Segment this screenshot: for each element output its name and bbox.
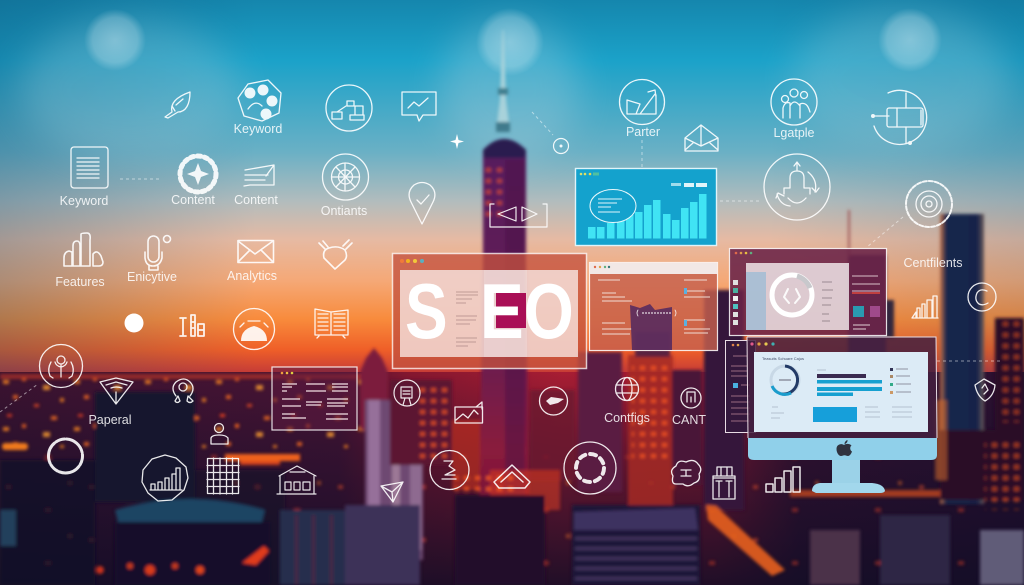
icon: signal bars	[766, 467, 800, 492]
panel: pink article window	[590, 262, 718, 350]
right buildings	[810, 530, 860, 585]
blue button	[813, 407, 857, 422]
label: Centfilents: Centfilents	[903, 256, 963, 270]
donut	[771, 366, 799, 394]
dome	[115, 499, 265, 526]
icon: C circle	[968, 283, 996, 311]
blocks mid	[530, 390, 575, 480]
screen title: Teasuits Schuare Cajus	[762, 356, 804, 361]
label: Contfigs: Contfigs	[604, 411, 650, 425]
panel: SEO window: E	[480, 269, 524, 355]
icon: target	[554, 138, 568, 154]
orange streak right	[706, 505, 785, 576]
icon: sparkle	[450, 134, 464, 149]
icon: fish circle	[540, 387, 568, 415]
icon: rocket	[165, 92, 190, 118]
icon: tool bars	[180, 315, 204, 336]
connector dashed lines	[0, 112, 1000, 412]
icon: house	[277, 466, 316, 494]
icon: speech chart	[402, 92, 436, 121]
icon: gear	[906, 181, 952, 227]
icon: bars rounded	[64, 233, 103, 266]
panel: SEO window: O	[524, 268, 574, 355]
label: Analytics: Analytics	[227, 269, 277, 283]
icon: paper plane	[381, 482, 403, 502]
panel: text list window	[272, 367, 357, 430]
icon: check pin	[409, 182, 435, 224]
apple logo	[836, 440, 852, 456]
label: Content 1: Content	[171, 193, 215, 207]
icon: grid	[207, 458, 239, 494]
icon: web circle	[322, 154, 368, 200]
label: Lgatple: Lgatple	[773, 126, 815, 140]
icon: tablet	[71, 147, 108, 188]
icon: envelope	[238, 240, 274, 262]
icon: team circle	[326, 85, 372, 131]
icon: circle arrows	[564, 442, 616, 494]
horizontal bars	[817, 374, 866, 378]
label: Features: Features	[55, 275, 105, 289]
icon: ball octagon	[238, 80, 281, 121]
screen	[754, 352, 928, 432]
label: Content 2: Content	[234, 193, 278, 207]
label: Keyword (left): Keyword	[60, 194, 108, 208]
panel: dashboard window	[730, 248, 886, 336]
label: Ontiants: Ontiants	[321, 204, 367, 218]
icon: headphones	[173, 379, 193, 402]
central tower	[478, 139, 530, 585]
icon: bars outline	[912, 296, 938, 318]
panel: blue bar chart window	[576, 168, 716, 246]
icon: lock cycle circle	[764, 154, 830, 220]
icon: blob	[124, 314, 144, 332]
icon: shield	[975, 379, 995, 401]
monitor	[747, 337, 937, 493]
icon: growth chart	[455, 402, 482, 423]
label: Paperal: Paperal	[88, 413, 132, 427]
bright streaks	[2, 443, 28, 450]
icon: pin rays	[319, 240, 352, 269]
icon: team circle right	[771, 79, 817, 125]
label: Keyword (top): Keyword	[234, 122, 282, 136]
icon: badge bars	[142, 455, 188, 501]
tower spire	[496, 30, 510, 132]
icon: message arrow	[244, 165, 274, 186]
icon: globe	[616, 378, 638, 400]
label: Enicytive: Enicytive	[127, 270, 177, 284]
panel: side list window	[726, 340, 756, 432]
dark block left	[95, 392, 195, 502]
SEO letters: S	[405, 268, 448, 355]
icon: microphone	[145, 236, 170, 270]
icon: hands circle	[40, 344, 82, 388]
icon: cloud gear	[672, 460, 701, 486]
icon: layered diamond	[100, 378, 133, 404]
icon: small globe	[394, 380, 420, 406]
icon: person	[211, 424, 228, 444]
ceiling lights	[84, 8, 942, 76]
icon: chevrons	[494, 465, 530, 488]
icon: checkmark chart circle	[620, 80, 664, 124]
label: CANT: CANT	[672, 413, 706, 427]
icon: ring	[48, 439, 82, 473]
icon: star burst	[180, 156, 216, 192]
icon: open envelope	[685, 125, 718, 151]
left towers	[360, 348, 388, 430]
bars	[588, 194, 706, 238]
icon: elevator	[713, 467, 735, 499]
icon: arrows bracket	[490, 204, 547, 227]
sky background	[0, 0, 1024, 380]
bottom slate building	[572, 505, 700, 585]
icon: CANT circle	[681, 388, 701, 408]
icon: bell circle	[234, 308, 274, 350]
bubble	[590, 190, 636, 222]
panel: SEO window	[392, 254, 586, 368]
label: Parter: Parter	[626, 125, 660, 139]
icon: battery orbit	[871, 90, 927, 145]
icon: sigma circle	[430, 450, 469, 490]
icon: open book	[315, 309, 348, 338]
